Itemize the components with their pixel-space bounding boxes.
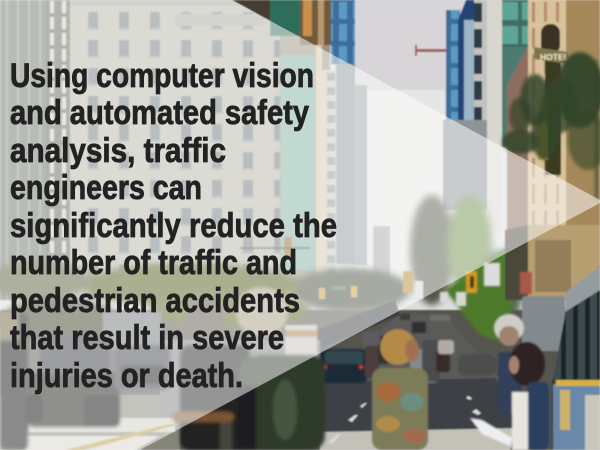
tan tower — [280, 36, 330, 286]
lower sky glow — [355, 90, 445, 290]
stone cornice — [70, 0, 240, 6]
tree canopy right — [502, 52, 600, 200]
road left side — [0, 395, 180, 450]
hotel sign — [534, 47, 569, 64]
dark rooftop — [232, 0, 272, 22]
people in foreground — [372, 314, 549, 450]
lower grey facade under overlay — [443, 120, 488, 210]
main statement text: analysis, traffic — [10, 132, 226, 170]
signal and white bus distant — [240, 325, 317, 385]
mid trees — [290, 195, 522, 330]
crosswalk — [28, 418, 175, 432]
woman with dark hair — [509, 342, 545, 386]
main statement text: and automated safety — [10, 94, 309, 132]
left glass building — [0, 0, 45, 300]
foreground pedestrians left — [172, 287, 325, 450]
left cars — [0, 312, 170, 450]
main statement text: pedestrian accidents — [10, 282, 300, 320]
tan hotel building — [528, 0, 600, 300]
white and green tower — [487, 0, 502, 230]
main statement text: that result in severe — [10, 319, 284, 357]
teal tower under overlay — [281, 55, 315, 270]
sky — [340, 0, 470, 300]
olive trees behind traffic — [0, 260, 310, 342]
bus — [552, 265, 600, 450]
signal mast arm — [240, 247, 310, 249]
building shade — [505, 225, 528, 300]
main statement text: Using computer vision — [10, 57, 314, 95]
traffic signals right — [403, 271, 413, 293]
main statement text: number of traffic and — [10, 244, 297, 282]
crane — [416, 49, 448, 52]
billboard — [103, 312, 161, 350]
road — [320, 378, 530, 435]
beige stone building — [70, 0, 280, 300]
main statement text: engineers can — [10, 169, 202, 207]
truck — [522, 296, 565, 351]
road markings — [328, 396, 481, 444]
cars center — [320, 314, 496, 383]
main statement text: injuries or death. — [10, 357, 243, 395]
far road — [320, 315, 505, 385]
building lower right — [528, 225, 600, 300]
woman in floral shirt — [380, 329, 416, 365]
blue towers right — [446, 10, 460, 180]
main statement text: significantly reduce the — [10, 207, 337, 245]
arch and post — [541, 24, 560, 54]
main statement text — [10, 57, 337, 395]
washed traffic signals — [284, 237, 292, 257]
street-side tree — [445, 245, 512, 345]
street ground — [0, 310, 600, 450]
white tower — [316, 45, 322, 275]
hotel sign: HOTEL — [540, 52, 569, 62]
signs and signals on street — [440, 263, 532, 306]
blue tower — [331, 0, 355, 64]
green building — [270, 0, 300, 36]
man — [494, 314, 524, 342]
sidewalk — [320, 428, 520, 450]
